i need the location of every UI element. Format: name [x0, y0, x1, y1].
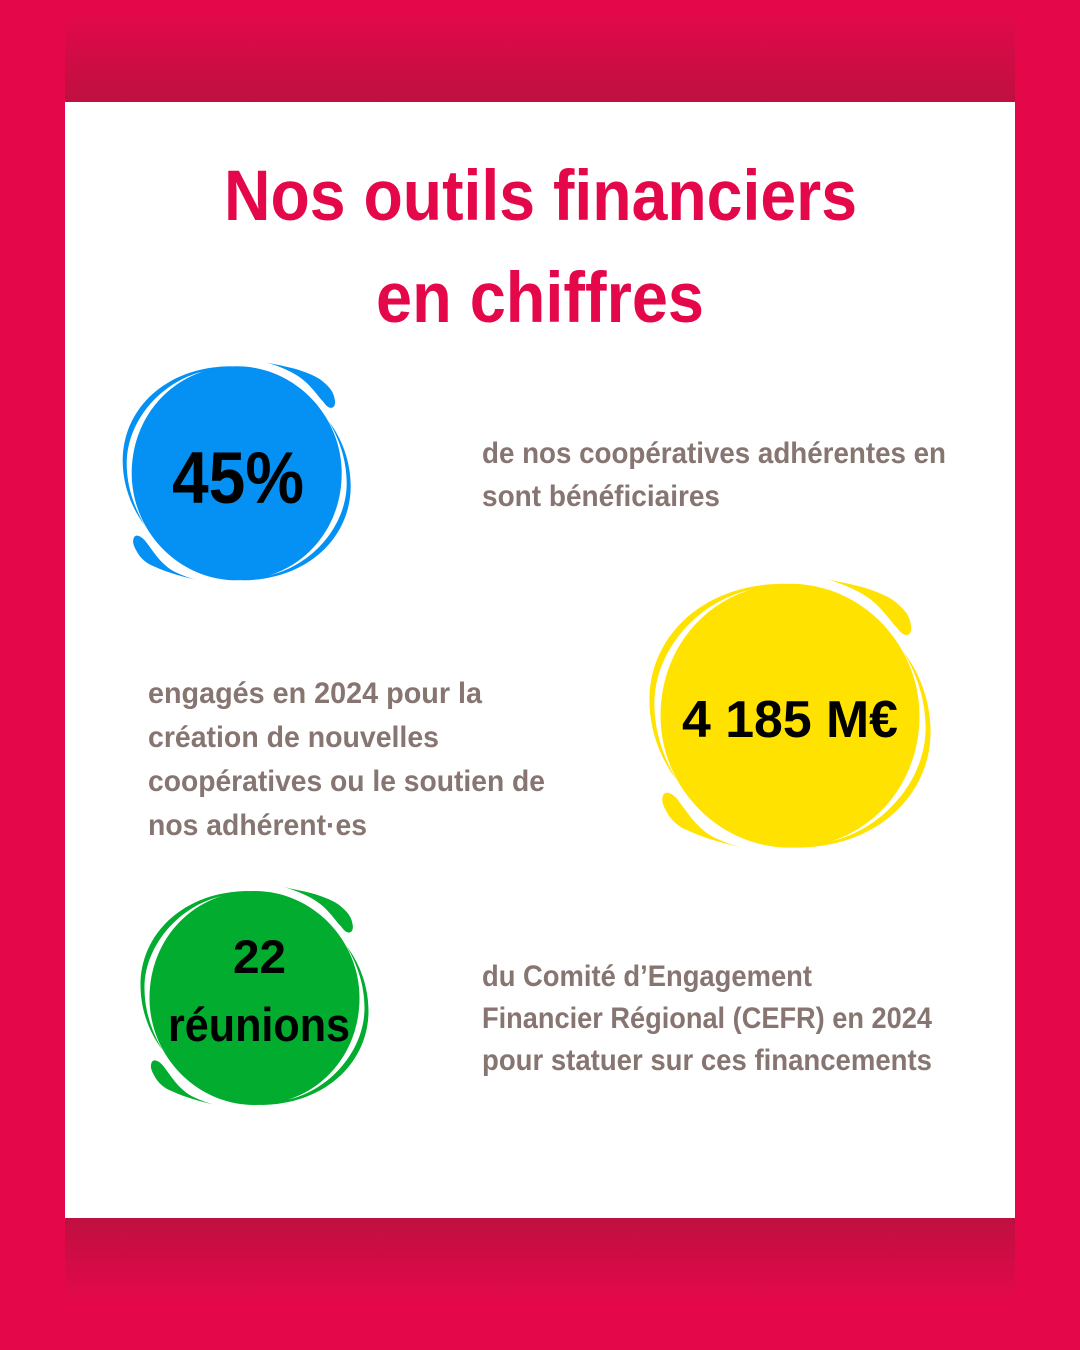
icon: blue blob [123, 362, 351, 581]
stat badge: 22 réunions [140, 887, 368, 1106]
value: 45%: 45% [172, 438, 304, 519]
icon: green blob [140, 887, 368, 1106]
description: 45% [482, 437, 946, 513]
description: 22 réunions: du Comité d’Engagement [482, 960, 812, 993]
description: 4 185 M€ [148, 677, 545, 842]
title: Nos outils financiers [224, 157, 857, 236]
icon: yellow blob [649, 579, 931, 849]
description: 22 réunions: pour statuer sur ces financements [482, 1044, 932, 1077]
title: en chiffres [376, 259, 704, 338]
description: 22 réunions [482, 960, 932, 1077]
description: 4 185 M€: nos adhérent·es [148, 809, 367, 842]
description: 4 185 M€: engagés en 2024 pour la [148, 677, 482, 710]
stat badge: 4 185 M€ [649, 579, 931, 849]
description: 45%: de nos coopératives adhérentes en [482, 437, 946, 470]
value: 22 réunions [168, 930, 350, 1051]
bottom shadow band [65, 1218, 1015, 1350]
description: 22 réunions: Financier Régional (CEFR) en 2024 [482, 1002, 932, 1035]
top shadow band [65, 0, 1015, 102]
white content panel [65, 102, 1015, 1218]
value: 22 réunions: 22 [233, 930, 286, 983]
description: 45%: sont bénéficiaires [482, 480, 720, 513]
title [224, 157, 857, 338]
description: 4 185 M€: coopératives ou le soutien de [148, 765, 545, 798]
stat badge: 45% [123, 362, 351, 581]
value: 22 réunions: réunions [168, 998, 350, 1051]
description: 4 185 M€: création de nouvelles [148, 721, 439, 754]
value: 4 185 M€: 4 185 M€ [682, 691, 898, 749]
